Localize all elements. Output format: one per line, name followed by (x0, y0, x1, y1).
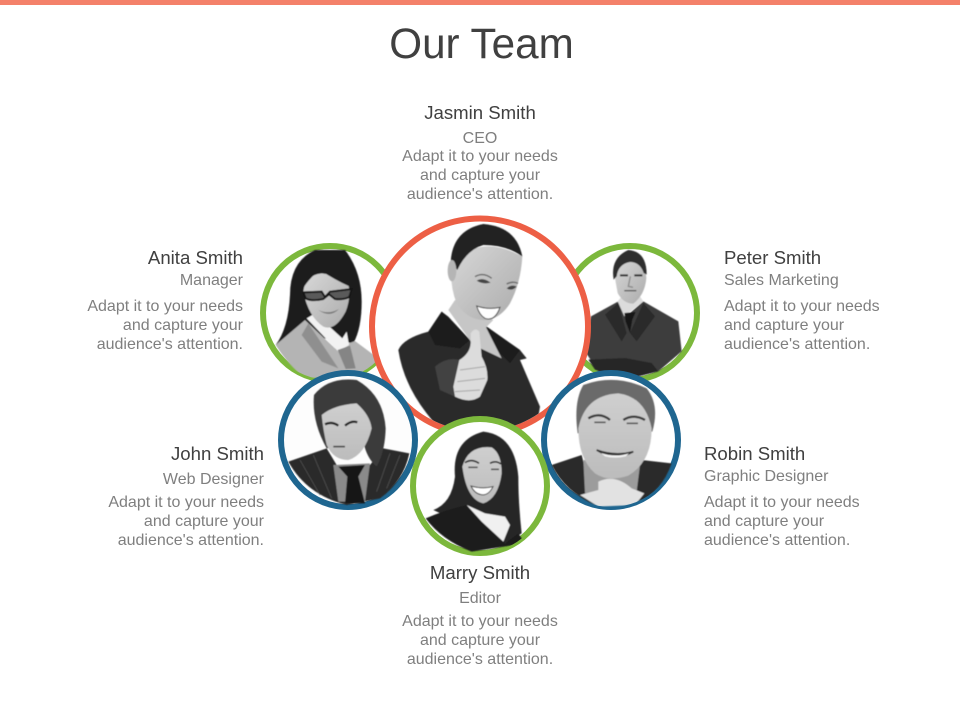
text block: Peter Smith: and capture your (724, 317, 845, 334)
text block: Marry Smith: and capture your (420, 632, 541, 649)
text block: Jasmin Smith: CEO (463, 130, 497, 147)
text block: Jasmin Smith: audience's attention. (407, 186, 553, 203)
text block: Robin Smith (704, 443, 860, 549)
text block: Peter Smith: Sales Marketing (724, 272, 839, 289)
text block: Robin Smith: Robin Smith (704, 443, 805, 464)
portrait: Peter Smith (563, 246, 697, 380)
text block: Robin Smith: audience's attention. (704, 532, 850, 549)
text block: Jasmin Smith: and capture your (420, 167, 541, 184)
text block: John Smith: audience's attention. (118, 532, 264, 549)
text block: Peter Smith: audience's attention. (724, 336, 870, 353)
portrait: Anita Smith (263, 246, 397, 380)
portrait: Marry Smith (413, 419, 547, 553)
text block: Anita Smith: Adapt it to your needs (87, 298, 243, 315)
top accent bar (0, 0, 960, 5)
text block: Jasmin Smith: Adapt it to your needs (402, 148, 558, 165)
text block: Jasmin Smith: Jasmin Smith (424, 102, 536, 123)
text block: Anita Smith: Manager (180, 272, 244, 289)
text block: Marry Smith: Marry Smith (430, 562, 530, 583)
portrait: John Smith (281, 373, 415, 507)
text block: John Smith: Adapt it to your needs (108, 494, 264, 511)
text block: Peter Smith: Adapt it to your needs (724, 298, 880, 315)
text block: Jasmin Smith (402, 102, 558, 203)
text block: Marry Smith (402, 562, 558, 668)
text block: Marry Smith: Editor (459, 590, 502, 607)
title: Our Team (389, 20, 574, 67)
text block: Marry Smith: Adapt it to your needs (402, 613, 558, 630)
text block: Robin Smith: Graphic Designer (704, 468, 829, 485)
text block: Marry Smith: audience's attention. (407, 651, 553, 668)
text block: Anita Smith (87, 247, 244, 353)
text block: Robin Smith: and capture your (704, 513, 825, 530)
text block: Peter Smith (724, 247, 880, 353)
text block: John Smith: and capture your (144, 513, 265, 530)
portrait: Jasmin Smith (CEO) (372, 218, 588, 434)
text block: Peter Smith: Peter Smith (724, 247, 821, 268)
text block: Robin Smith: Adapt it to your needs (704, 494, 860, 511)
text block: John Smith: John Smith (171, 443, 264, 464)
text block: John Smith (108, 443, 265, 549)
text block: Anita Smith: audience's attention. (97, 336, 243, 353)
text block: Anita Smith: and capture your (123, 317, 244, 334)
text block: John Smith: Web Designer (163, 471, 265, 488)
portrait: Robin Smith (544, 373, 678, 507)
text block: Anita Smith: Anita Smith (148, 247, 243, 268)
